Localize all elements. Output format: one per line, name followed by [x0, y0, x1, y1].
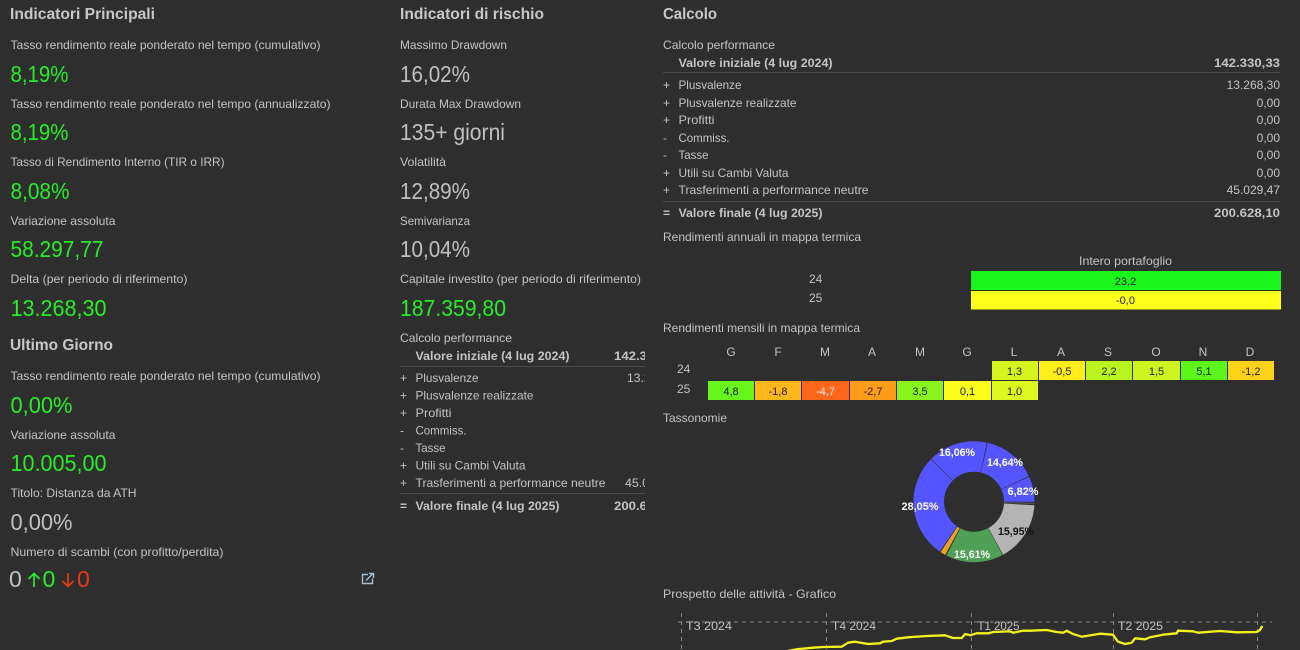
heading: ultimo giorno: Ultimo Giorno	[10, 337, 113, 354]
table: calcolo performance (ritagliata): Profitti	[416, 406, 452, 420]
table: calcolo performance: 0,00	[1257, 96, 1280, 110]
heatmap: rendimenti annuali: Rendimenti annuali in mappa termica	[663, 230, 861, 244]
metric: distanza da ATH: Titolo: Distanza da ATH	[10, 486, 136, 500]
table: calcolo performance: 0,00	[1257, 113, 1280, 127]
table: calcolo performance: 0,00	[1257, 148, 1280, 162]
table: calcolo performance: 0,00	[1257, 166, 1280, 180]
heatmap: rendimenti annuali: Intero portafoglio	[1079, 254, 1172, 268]
icon: open external link	[362, 574, 374, 584]
heatmap: rendimenti mensili: O	[1151, 345, 1161, 359]
donut chart: tassonomie: 6,82%	[1008, 486, 1039, 498]
heatmap: rendimenti mensili: M	[820, 345, 830, 359]
metric: delta	[10, 272, 188, 321]
metric: delta: 13.268,30	[10, 295, 106, 321]
table: calcolo performance: 13.268,30	[1227, 78, 1280, 92]
heatmap: rendimenti mensili: L	[1011, 345, 1018, 359]
donut chart: tassonomie: 14,64%	[987, 457, 1023, 469]
table: calcolo performance (ritagliata): 13.268,30	[627, 371, 681, 385]
table: calcolo performance (ritagliata): -	[400, 424, 404, 438]
line chart: prospetto delle attivita: Prospetto delle attività - Grafico	[663, 587, 836, 601]
table: calcolo performance: Tasse	[678, 148, 709, 162]
metric: numero di scambi: 0	[77, 566, 90, 592]
metric: delta: Delta (per periodo di riferimento)	[10, 272, 188, 286]
heatmap: rendimenti mensili: 1,5	[1149, 366, 1164, 378]
table: calcolo performance: +	[663, 96, 670, 110]
heatmap: rendimenti annuali: 25	[809, 291, 823, 305]
table: calcolo performance (ritagliata): 200.628,10	[614, 499, 680, 513]
metric: capitale investito: Capitale investito (per periodo di riferimento)	[400, 272, 641, 286]
table: calcolo performance: +	[663, 113, 670, 127]
table: calcolo performance: Valore iniziale (4 lug 2024)	[678, 56, 832, 70]
metric: distanza da ATH: 0,00%	[10, 509, 72, 535]
metric: TIR: Tasso di Rendimento Interno (TIR o IRR)	[10, 155, 224, 169]
heatmap: rendimenti mensili: M	[915, 345, 925, 359]
table: calcolo performance (ritagliata): =	[400, 499, 407, 513]
metric: variazione assoluta	[10, 214, 116, 262]
heatmap: rendimenti mensili: N	[1199, 345, 1207, 359]
heatmap: rendimenti mensili: G	[962, 345, 972, 359]
heatmap: rendimenti mensili: -0,5	[1053, 366, 1071, 378]
line chart: prospetto delle attivita: T2 2025	[1118, 619, 1163, 633]
metric: TWR ultimo giorno: Tasso rendimento reale ponderato nel tempo (cumulativo)	[10, 369, 320, 383]
metric: capitale investito: 187.359,80	[400, 295, 506, 321]
table: calcolo performance: 45.029,47	[1227, 183, 1280, 197]
table: calcolo performance (ritagliata): Commiss.	[416, 424, 466, 438]
metric: TWR cumulativo: 8,19%	[10, 61, 68, 87]
metric: variazione ultimo giorno: Variazione assoluta	[10, 428, 116, 442]
heatmap: rendimenti mensili: 5,1	[1196, 366, 1212, 378]
heading: calcolo: Calcolo	[663, 6, 717, 23]
heatmap: rendimenti mensili: 24	[677, 362, 691, 376]
table: calcolo performance (ritagliata): Utili su Cambi Valuta	[416, 458, 526, 472]
table: calcolo performance: =	[663, 206, 670, 220]
metric: volatilita: Volatilità	[400, 155, 446, 169]
heatmap: rendimenti mensili: 1,0	[1007, 386, 1022, 398]
table: calcolo performance: 0,00	[1257, 131, 1280, 145]
donut chart: tassonomie	[902, 447, 1039, 561]
panel: calcolo	[663, 6, 1281, 650]
heatmap: rendimenti annuali	[663, 230, 1281, 310]
metric: massimo drawdown: 16,02%	[400, 61, 470, 87]
table: calcolo performance (ritagliata): 45.029,47	[625, 476, 680, 490]
heatmap: rendimenti mensili: -1,2	[1242, 366, 1260, 378]
metric: massimo drawdown	[400, 38, 507, 87]
metric: durata max drawdown: 135+ giorni	[400, 119, 505, 145]
table: calcolo performance (ritagliata): +	[400, 406, 407, 420]
metric: numero di scambi: 0	[42, 566, 55, 592]
heatmap: rendimenti mensili: F	[774, 345, 782, 359]
table: calcolo performance (ritagliata): Valore iniziale (4 lug 2024)	[416, 349, 570, 363]
table: calcolo performance: Calcolo performance	[663, 38, 775, 52]
table: calcolo performance: +	[663, 166, 670, 180]
donut chart: tassonomie: 15,95%	[998, 526, 1034, 538]
table: calcolo performance (ritagliata): 142.330,33	[614, 349, 680, 363]
table: calcolo performance (ritagliata): +	[400, 476, 407, 490]
metric: numero di scambi: 0	[9, 566, 22, 592]
metric: volatilita	[400, 155, 470, 204]
table: calcolo performance: -	[663, 148, 667, 162]
heatmap: rendimenti mensili: -1,8	[769, 386, 787, 398]
table: calcolo performance: Valore finale (4 lug 2025)	[678, 206, 822, 220]
heatmap: rendimenti mensili: A	[868, 345, 876, 359]
metric: TWR annualizzato: 8,19%	[10, 119, 68, 145]
metric: numero di scambi: Numero di scambi (con profitto/perdita)	[10, 545, 224, 559]
metric: TWR annualizzato: Tasso rendimento reale ponderato nel tempo (annualizzato)	[10, 97, 331, 111]
heatmap: rendimenti mensili: 4,8	[723, 386, 739, 398]
heatmap: rendimenti mensili: -2,7	[864, 386, 882, 398]
metric: TWR cumulativo: Tasso rendimento reale ponderato nel tempo (cumulativo)	[10, 38, 320, 52]
heatmap: rendimenti mensili: 2,2	[1101, 366, 1117, 378]
table: calcolo performance (ritagliata): Plusvalenze realizzate	[416, 388, 534, 402]
table: calcolo performance (ritagliata): Calcolo performance	[400, 331, 512, 345]
table: calcolo performance (ritagliata): Tasse	[416, 441, 446, 455]
panel: indicatori principali	[10, 6, 331, 321]
panel: indicatori di rischio	[400, 8, 645, 512]
metric: capitale investito	[400, 272, 641, 321]
table: calcolo performance: +	[663, 183, 670, 197]
heatmap: rendimenti annuali: 24	[809, 272, 823, 286]
metric: variazione assoluta: 58.297,77	[10, 236, 104, 262]
heatmap: rendimenti mensili: A	[1057, 345, 1065, 359]
heatmap: rendimenti mensili	[663, 321, 1274, 400]
donut chart: tassonomie: 15,61%	[954, 549, 990, 561]
metric: durata max drawdown	[400, 97, 521, 145]
metric: variazione ultimo giorno: 10.005,00	[10, 450, 106, 476]
heatmap: rendimenti mensili: Rendimenti mensili in mappa termica	[663, 321, 860, 335]
heading: indicatori di rischio: Indicatori di rischio	[400, 6, 544, 23]
table: calcolo performance: Profitti	[678, 113, 714, 127]
table: calcolo performance: Trasferimenti a performance neutre	[678, 183, 869, 197]
heatmap: rendimenti mensili: D	[1246, 345, 1255, 359]
metric: TWR ultimo giorno: 0,00%	[10, 392, 72, 418]
table: calcolo performance (ritagliata): +	[400, 458, 407, 472]
table: calcolo performance (ritagliata): Plusvalenze	[416, 371, 479, 385]
heatmap: rendimenti mensili: 1,3	[1007, 366, 1022, 378]
table: calcolo performance (ritagliata): +	[400, 371, 407, 385]
table: calcolo performance: Plusvalenze realizzate	[678, 96, 797, 110]
metric: semivarianza: Semivarianza	[400, 214, 470, 228]
heatmap: rendimenti mensili: -4,7	[816, 386, 835, 398]
metric: TIR: 8,08%	[10, 178, 70, 204]
table: calcolo performance: Utili su Cambi Valuta	[678, 166, 789, 180]
table: calcolo performance: -	[663, 131, 667, 145]
table: calcolo performance (ritagliata): -	[400, 441, 404, 455]
heading: tassonomie: Tassonomie	[663, 411, 727, 425]
metric: massimo drawdown: Massimo Drawdown	[400, 38, 507, 52]
table: calcolo performance: 142.330,33	[1214, 56, 1280, 70]
metric: variazione ultimo giorno	[10, 428, 116, 476]
table: calcolo performance (ritagliata): Trasferimenti a performance neutre	[416, 476, 606, 490]
metric: TWR cumulativo	[10, 38, 320, 87]
metric: TWR annualizzato	[10, 97, 331, 145]
table: calcolo performance: Plusvalenze	[678, 78, 742, 92]
metric: durata max drawdown: Durata Max Drawdown	[400, 97, 521, 111]
table: calcolo performance (ritagliata)	[400, 334, 645, 512]
heatmap: rendimenti annuali: -0,0	[1116, 295, 1135, 307]
heatmap: rendimenti mensili: S	[1104, 345, 1112, 359]
heatmap: rendimenti mensili: 0,1	[960, 386, 975, 398]
table: calcolo performance (ritagliata): +	[400, 388, 407, 402]
heatmap: rendimenti mensili: 3,5	[912, 386, 928, 398]
table: calcolo performance (ritagliata): Valore finale (4 lug 2025)	[416, 499, 560, 513]
heatmap: rendimenti mensili: G	[726, 345, 736, 359]
metric: TIR	[10, 155, 224, 204]
metric: volatilita: 12,89%	[400, 178, 470, 204]
heatmap: rendimenti mensili: 25	[677, 382, 691, 396]
table: calcolo performance: +	[663, 78, 670, 92]
metric: TWR ultimo giorno	[10, 369, 320, 418]
donut chart: tassonomie: 28,05%	[902, 501, 939, 513]
table: calcolo performance	[663, 38, 1280, 220]
heatmap: rendimenti annuali: 23,2	[1115, 276, 1136, 288]
line chart: prospetto delle attivita	[663, 587, 1272, 650]
table: calcolo performance: 200.628,10	[1214, 206, 1280, 220]
table: calcolo performance: Commiss.	[678, 131, 730, 145]
panel: ultimo giorno	[9, 337, 374, 592]
metric: variazione assoluta: Variazione assoluta	[10, 214, 116, 228]
donut chart: tassonomie: 16,06%	[939, 447, 975, 459]
heading: indicatori principali: Indicatori Principali	[10, 6, 155, 23]
metric: distanza da ATH	[10, 486, 136, 535]
line chart: prospetto delle attivita: T4 2024	[832, 619, 876, 633]
metric: semivarianza: 10,04%	[400, 236, 470, 262]
metric: semivarianza	[400, 214, 470, 262]
metric: numero di scambi	[9, 545, 224, 592]
line chart: prospetto delle attivita: T1 2025	[978, 619, 1020, 633]
line chart: prospetto delle attivita: T3 2024	[686, 619, 732, 633]
